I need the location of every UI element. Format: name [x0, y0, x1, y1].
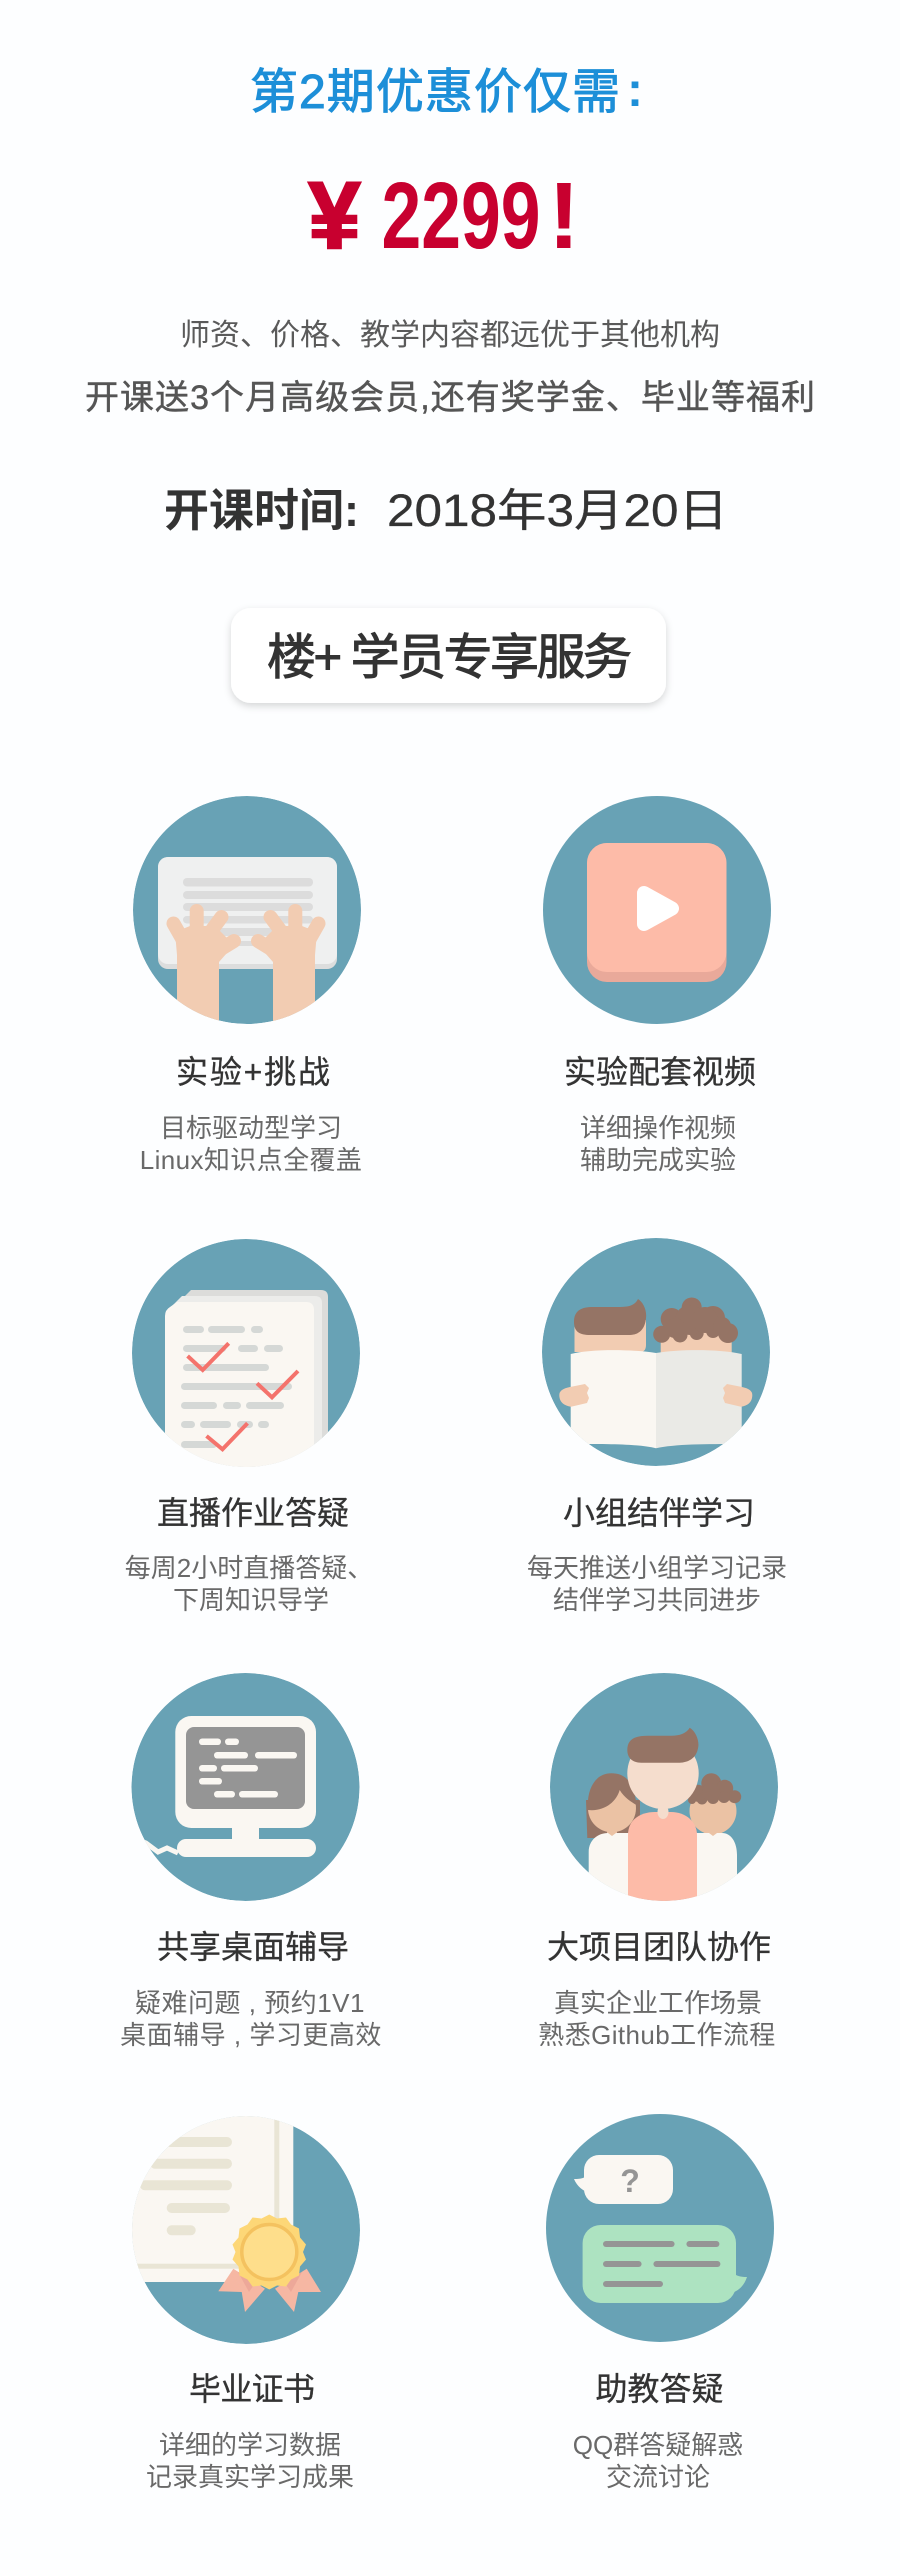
card description: Linux知识点全覆盖 [140, 1145, 362, 1175]
text: start date: 2018年3月20日 [387, 485, 728, 536]
card title: 毕业证书 [189, 2371, 315, 2407]
text: start date [164, 485, 728, 536]
price: ! [548, 163, 580, 269]
panel: 大项目团队协作 [538, 1673, 778, 2050]
text: benefits: 开课送3个月高级会员,还有奖学金、毕业等福利 [85, 379, 815, 417]
card description: 辅助完成实验 [580, 1145, 736, 1175]
heading: discount offer: : [627, 64, 643, 117]
card description: 结伴学习共同进步 [553, 1585, 761, 1615]
text: advantage statement: 师资、价格、教学内容都远优于其他机构 [180, 319, 720, 352]
icon: certificate with medal [120, 2110, 360, 2344]
heading: discount offer: 第2期优惠价仅需 [250, 66, 620, 119]
card description: 目标驱动型学习 [160, 1113, 342, 1143]
card description: 详细的学习数据 [159, 2430, 341, 2460]
card title: 助教答疑 [595, 2371, 724, 2407]
icon: chat bubbles: ? [620, 2163, 640, 2199]
panel: 实验+挑战 [133, 796, 362, 1175]
card description: 下周知识导学 [173, 1585, 329, 1615]
card description: QQ群答疑解惑 [573, 2430, 743, 2460]
card description: 交流讨论 [606, 2462, 710, 2492]
text: start date: 开课时间: [164, 485, 359, 536]
section heading button [231, 608, 666, 703]
icon: chat bubbles [546, 2114, 774, 2342]
icon: team of three [550, 1673, 778, 1905]
card title: 实验配套视频 [564, 1054, 756, 1090]
icon: desktop computer [132, 1673, 360, 1901]
icon: two people reading newspaper [542, 1238, 770, 1466]
price: ¥ [308, 163, 361, 269]
card title: 大项目团队协作 [547, 1929, 771, 1965]
icon: homework paper with checks [132, 1239, 360, 1480]
card title: 直播作业答疑 [157, 1495, 349, 1531]
icon: video play tablet [543, 796, 771, 1024]
card description: 记录真实学习成果 [146, 2462, 354, 2492]
card description: 真实企业工作场景 [554, 1988, 762, 2018]
card description: 疑难问题 , 预约1V1 [135, 1988, 365, 2018]
panel: 毕业证书 [120, 2110, 360, 2492]
card description: 熟悉Github工作流程 [538, 2020, 776, 2050]
panel: 小组结伴学习 [527, 1238, 787, 1615]
panel: 共享桌面辅导 [120, 1673, 382, 2050]
card description: 每周2小时直播答疑、 [125, 1553, 373, 1583]
card description: 详细操作视频 [580, 1113, 736, 1143]
panel: 助教答疑 [546, 2114, 774, 2492]
card title: 实验+挑战 [176, 1054, 330, 1090]
price: 2299 [382, 163, 540, 269]
icon: hands on keyboard [133, 796, 361, 1025]
card description: 桌面辅导 , 学习更高效 [120, 2020, 382, 2050]
card title: 小组结伴学习 [563, 1495, 755, 1531]
section heading button: 楼+ 学员专享服务 [267, 631, 632, 685]
card title: 共享桌面辅导 [157, 1929, 349, 1965]
panel: 直播作业答疑 [125, 1239, 373, 1615]
price [308, 163, 580, 269]
panel: 实验配套视频 [543, 796, 771, 1175]
card description: 每天推送小组学习记录 [527, 1553, 787, 1583]
